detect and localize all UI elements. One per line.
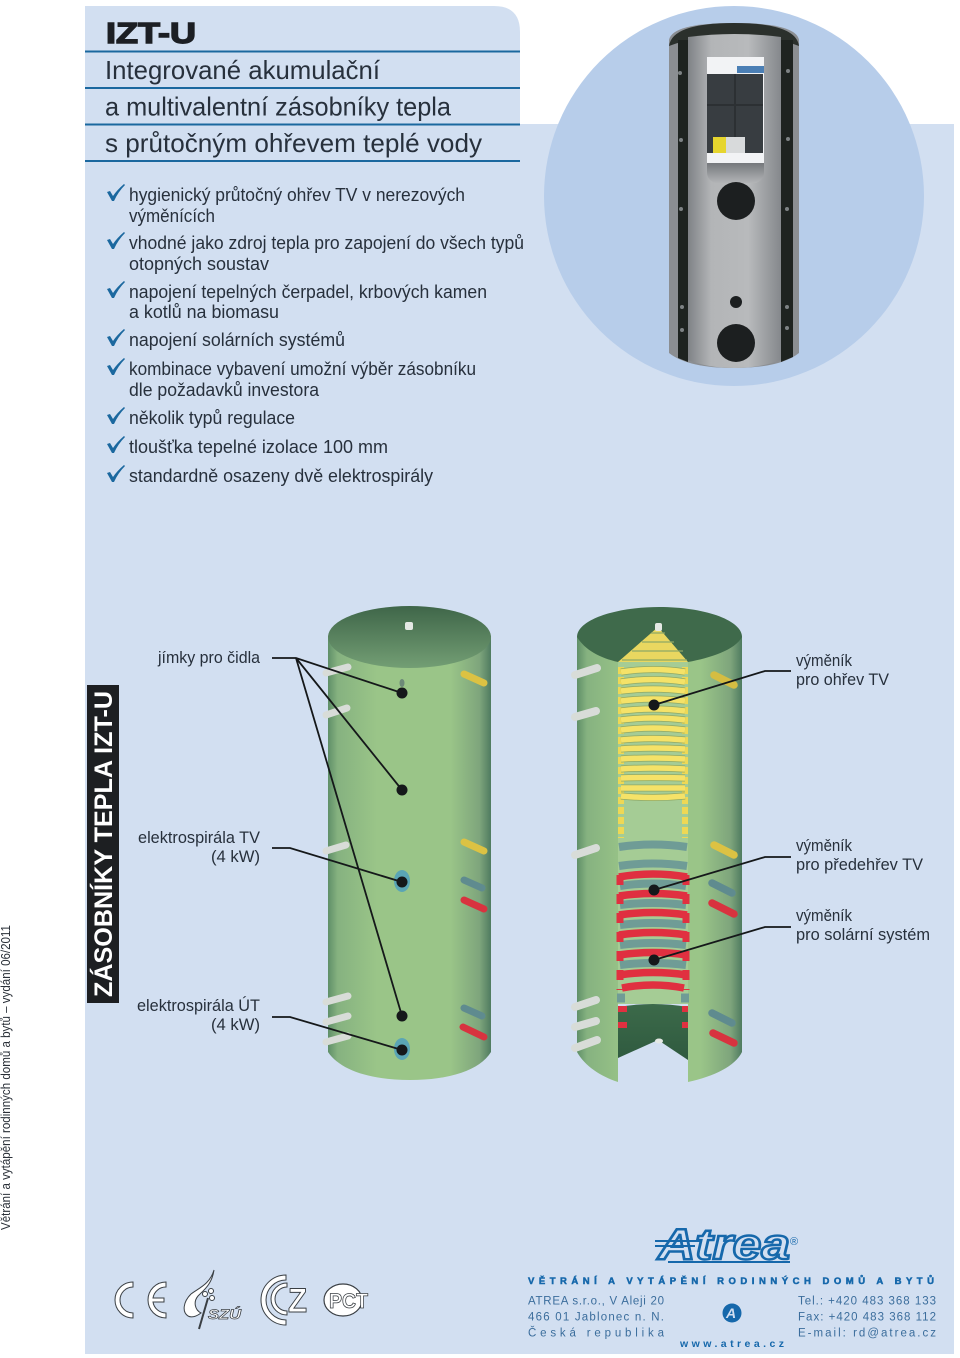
feature list: otopných soustav [129, 254, 269, 274]
label: exchanger preheat: pro předehřev TV [796, 856, 923, 874]
label: heating element TV: elektrospirála TV [138, 829, 260, 847]
right connections [712, 675, 734, 1043]
flange covers [717, 182, 755, 362]
label: exchanger hot water [796, 652, 889, 689]
feature list: výměnících [129, 206, 215, 226]
feature list: několik typů regulace [129, 408, 295, 428]
vertical section heading: ZÁSOBNÍKY TEPLA IZT-U [89, 691, 118, 997]
label: heating element UT: elektrospirála ÚT [137, 996, 260, 1015]
feature list: napojení solárních systémů [129, 330, 345, 350]
label: exchanger preheat [796, 837, 923, 874]
company address: 466 01 Jablonec n. N. [528, 1312, 664, 1324]
right connections [463, 674, 484, 1037]
logo: PCT [324, 1284, 368, 1316]
fittings [655, 623, 662, 631]
icons: check marks [107, 184, 125, 482]
company contacts: Fax: +420 483 368 112 [798, 1312, 936, 1324]
feature list: vhodné jako zdroj tepla pro zapojení do všech typů [129, 233, 524, 253]
feature list [129, 185, 524, 486]
logo: SZU: SZÚ [208, 1305, 242, 1322]
feature list: a kotlů na biomasu [129, 302, 279, 322]
interior top [577, 607, 742, 662]
back wall [618, 662, 688, 1004]
label: heating element UT: (4 kW) [211, 1016, 260, 1034]
product photo: tank exterior [669, 23, 799, 368]
logo: Atrea: ® [790, 1236, 798, 1248]
title: IZT-U [106, 18, 196, 50]
top fitting [405, 622, 413, 630]
website: www.atrea.cz [679, 1338, 784, 1350]
label: exchanger hot water: pro ohřev TV [796, 671, 889, 689]
heating coil for hot water [618, 627, 688, 838]
company contacts: Tel.: +420 483 368 133 [798, 1296, 936, 1308]
icon: Atrea emblem: A [725, 1305, 736, 1321]
feature list: tloušťka tepelné izolace 100 mm [129, 437, 388, 457]
feature list: kombinace vybavení umožní výběr zásobníku [129, 359, 476, 379]
logo: Atrea: Atrea [657, 1220, 790, 1269]
shell [577, 637, 742, 1082]
company contacts [798, 1296, 936, 1340]
feature list: napojení tepelných čerpadel, krbových kamen [129, 282, 487, 302]
bolts [678, 69, 790, 332]
subtitle: Integrované akumulační [105, 55, 381, 85]
company address: ATREA s.r.o., V Aleji 20 [528, 1296, 664, 1308]
label: exchanger solar: pro solární systém [796, 926, 930, 944]
logo: CCZ [261, 1275, 307, 1325]
label: heating element UT [137, 996, 260, 1034]
logo: CCZ: Z [288, 1282, 307, 1320]
left pipes [326, 667, 348, 1042]
company address [528, 1296, 665, 1340]
label: exchanger preheat: výměník [796, 837, 853, 855]
circle behind product photo [544, 6, 924, 386]
label: heating element TV [138, 829, 260, 866]
label: exchanger solar: výměník [796, 907, 853, 925]
subtitle: a multivalentní zásobníky tepla [105, 92, 452, 122]
tank: cutaway view [575, 607, 742, 1082]
subtitle: s průtočným ohřevem teplé vody [105, 128, 482, 158]
label: exchanger solar [796, 907, 930, 944]
leader lines and dots [272, 658, 791, 1056]
heading rules [85, 52, 520, 161]
label: sensor wells: jímky pro čidla [157, 649, 261, 667]
interior bottom [618, 1004, 688, 1060]
left pipes [575, 668, 597, 1048]
control panel [707, 57, 764, 183]
feature list: hygienický průtočný ohřev TV v nerezových [129, 185, 465, 205]
logo: PCT: PCT [329, 1290, 368, 1313]
company slogan: VĚTRÁNÍ A VYTÁPĚNÍ RODINNÝCH DOMŮ A BYTŮ [528, 1275, 934, 1287]
certification logos [115, 1270, 368, 1329]
logo: CE [115, 1282, 166, 1318]
solar coil [618, 874, 688, 1025]
logo: SZU [184, 1270, 242, 1329]
company address: Česká republika [528, 1326, 665, 1340]
company contacts: E-mail: rd@atrea.cz [798, 1328, 936, 1340]
icon: Atrea emblem [722, 1304, 742, 1322]
label: heating element TV: (4 kW) [211, 848, 260, 866]
preheating coil [617, 844, 689, 998]
feature list: dle požadavků investora [129, 380, 320, 400]
blue sleeves [394, 870, 410, 892]
subtitle [105, 55, 482, 158]
label: exchanger hot water: výměník [796, 652, 853, 670]
feature list: standardně osazeny dvě elektrospirály [129, 466, 433, 486]
tank: exterior view [326, 606, 491, 1080]
